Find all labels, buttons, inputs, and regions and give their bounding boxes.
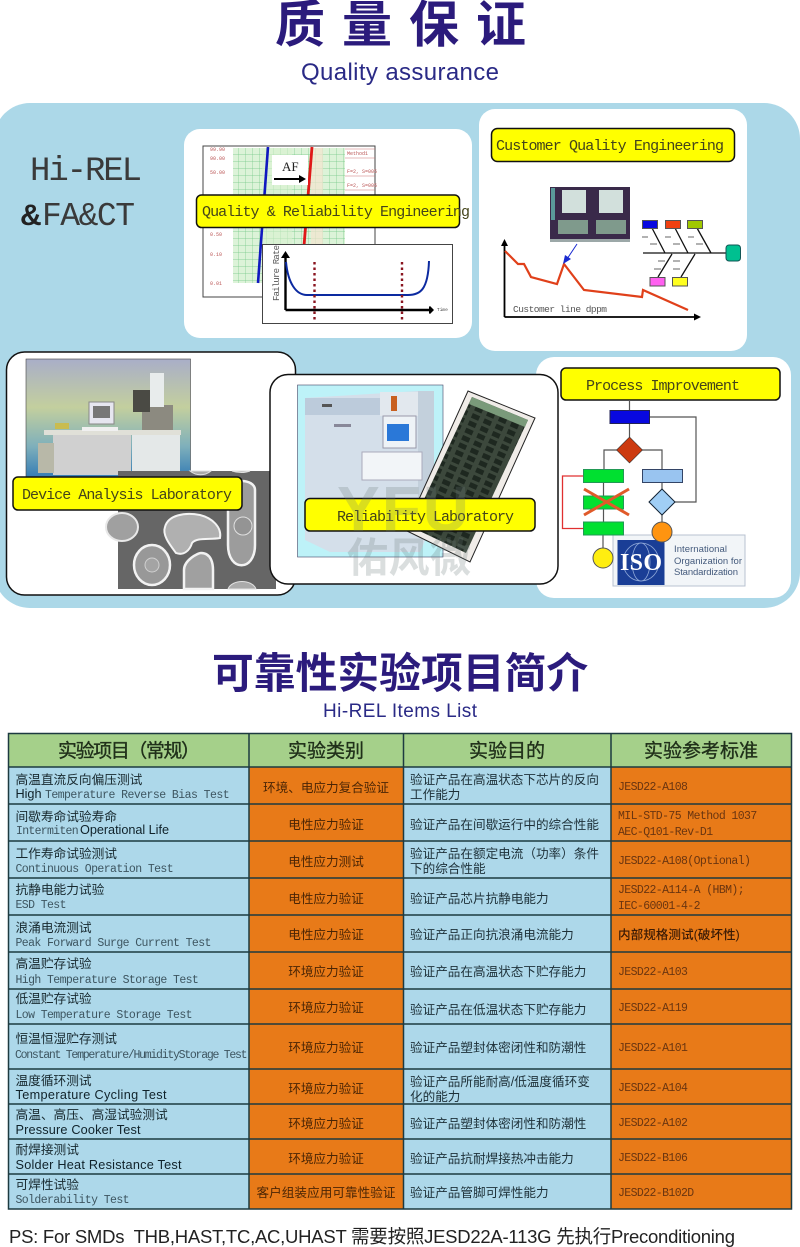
row: solderability: Solderability Test — [16, 1194, 129, 1207]
row: solderability: 验证产品管脚可焊性能力 — [410, 1185, 549, 1200]
row: temperature cycling: JESD22-A104 — [618, 1082, 688, 1095]
row: solder heat resistance: JESD22-B106 — [618, 1152, 688, 1165]
chart: Weibull acceleration plot: 0.10 — [210, 252, 222, 258]
row: temperature cycling: 温度循环测试 — [16, 1073, 92, 1088]
logo: ISO: ISO — [620, 550, 662, 576]
watermark: 佑风微 — [347, 535, 471, 581]
label: Device Analysis Laboratory: Device Analysis Laboratory — [22, 487, 232, 504]
row: pressure cooker: 高温、高压、高湿试验测试 — [16, 1107, 168, 1122]
subtitle: Quality assurance: Quality assurance — [301, 59, 499, 86]
panel: Customer Quality Engineering — [479, 109, 747, 351]
row: constant temperature humidity: 验证产品塑封体密闭性和防潮性 — [410, 1040, 586, 1055]
row: solderability: 可焊性试验 — [16, 1177, 79, 1192]
chart: Weibull acceleration plot: 0.01 — [210, 281, 222, 287]
row: pressure cooker: JESD22-A102 — [618, 1117, 688, 1130]
row: ESD: 抗静电能力试验 — [16, 882, 105, 897]
row: ESD: ESD Test — [16, 899, 66, 912]
row: HTRB: 高温直流反向偏压测试 — [16, 772, 143, 787]
row: pressure cooker: 环境应力验证 — [288, 1116, 364, 1131]
row: HTRB: High — [16, 787, 42, 801]
chart: Weibull acceleration plot: 90.00 — [210, 156, 225, 162]
row: surge: 电性应力验证 — [288, 927, 364, 942]
row: low temperature storage: Low Temperature Storage Test — [16, 1009, 192, 1022]
row: constant temperature humidity: 环境应力验证 — [288, 1040, 364, 1055]
diagram: fishbone — [642, 220, 740, 286]
row: surge: 浪涌电流测试 — [16, 921, 92, 935]
row: temperature cycling: Temperature Cycling Test — [16, 1088, 167, 1102]
row: HTRB: 验证产品在高温状态下芯片的反向 — [410, 772, 599, 787]
row: HTRB: 工作能力 — [410, 788, 460, 802]
footnote: PS: For SMDs THB,HAST,TC,AC,UHAST 需要按照JESD22A-113G 先执行Preconditioning — [9, 1226, 735, 1247]
row: surge: 内部规格测试(破坏性) — [618, 927, 740, 942]
chart: customer line dppm — [501, 239, 701, 320]
row: solderability: 客户组装应用可靠性验证 — [256, 1185, 396, 1200]
row: solder heat resistance: 耐焊接测试 — [16, 1142, 79, 1157]
row: high temperature storage: 验证产品在高温状态下贮存能力 — [410, 964, 586, 979]
row: HTRB: JESD22-A108 — [618, 781, 688, 794]
chart: Weibull acceleration plot: F=2, S=005 — [347, 169, 377, 175]
row: solderability: JESD22-B102D — [618, 1187, 694, 1200]
label: Quality and Reliability Engineering: Quality & Reliability Engineering — [202, 204, 470, 221]
row: low temperature storage: JESD22-A119 — [618, 1002, 688, 1015]
table header: 实验参考标准 — [644, 740, 758, 762]
row: solder heat resistance — [16, 1142, 688, 1172]
row: constant temperature humidity — [15, 1032, 688, 1062]
row: intermittent operational life: 间歇寿命试验寿命 — [16, 809, 117, 824]
row: HTRB: Temperature Reverse Bias Test — [45, 789, 229, 802]
panel: blue capabilities background — [0, 103, 800, 608]
image: electron microscope workstation — [26, 359, 190, 480]
chart: failure rate bathtub curve: Time — [437, 307, 448, 313]
label: Customer Quality Engineering: Customer Quality Engineering — [496, 138, 724, 155]
logo: ISO: Standardization — [674, 567, 738, 578]
panel: Quality and Reliability Engineering — [184, 129, 472, 338]
table header: 实验目的 — [469, 740, 545, 762]
row: intermittent operational life: 验证产品在间歇运行中的综合性能 — [410, 817, 599, 832]
row: ESD — [16, 882, 744, 913]
row: solder heat resistance: 验证产品抗耐焊接热冲击能力 — [410, 1151, 574, 1166]
label: Reliability Laboratory — [305, 498, 535, 531]
row: high temperature storage: 环境应力验证 — [288, 964, 364, 979]
row: high temperature storage: High Temperature Storage Test — [16, 974, 198, 987]
row: surge: Peak Forward Surge Current Test — [16, 937, 211, 950]
row: surge — [16, 921, 740, 950]
panel: Process Improvement — [536, 357, 791, 598]
image: chip die photo — [550, 187, 630, 242]
logo: ISO: International — [674, 544, 727, 555]
diagram: process flowchart — [562, 400, 696, 568]
row: continuous operation: 电性应力测试 — [288, 854, 364, 869]
row: intermittent operational life: Intermiten — [16, 825, 78, 838]
row: constant temperature humidity: Constant Temperature/HumidityStorage Test — [15, 1049, 247, 1062]
label: Reliability Laboratory: Reliability Laboratory — [337, 509, 514, 526]
watermark — [337, 473, 471, 581]
table header — [58, 740, 758, 762]
heading: Hi-REL &FA&CT: FA&CT — [42, 198, 135, 235]
chart: Weibull acceleration plot: 50.00 — [210, 170, 225, 176]
row: low temperature storage: 验证产品在低温状态下贮存能力 — [410, 1002, 586, 1017]
logo: ISO: Organization for — [674, 556, 742, 567]
row: pressure cooker: 验证产品塑封体密闭性和防潮性 — [410, 1116, 586, 1131]
image: burn-in circuit board — [405, 391, 535, 562]
panel: Reliability Laboratory — [270, 374, 558, 584]
row: pressure cooker — [16, 1107, 688, 1137]
watermark: YFU — [337, 473, 469, 545]
row: intermittent operational life: 电性应力验证 — [288, 817, 364, 832]
chart: Weibull acceleration plot: F=2, S=005 — [347, 183, 377, 189]
label: Process Improvement — [561, 368, 780, 400]
chart: Weibull acceleration plot — [203, 146, 377, 297]
table header: 实验类别 — [288, 740, 364, 762]
row: continuous operation: Continuous Operation Test — [16, 863, 173, 876]
row: pressure cooker: Pressure Cooker Test — [16, 1123, 141, 1137]
row: intermittent operational life: MIL-STD-75 Method 1037 — [618, 810, 757, 823]
chart: Weibull acceleration plot: 99.90 — [210, 147, 225, 153]
row: continuous operation: JESD22-A108(Optional) — [618, 855, 750, 868]
row: intermittent operational life: Operational Life — [80, 823, 169, 837]
row: temperature cycling: 验证产品所能耐高/低温度循环变 — [410, 1074, 590, 1089]
label: Device Analysis Laboratory — [13, 477, 242, 510]
image: SEM micrograph — [106, 471, 276, 589]
title: Hi-REL items Chinese: 可靠性实验项目简介 — [212, 650, 588, 697]
row: continuous operation: 验证产品在额定电流（功率）条件 — [410, 846, 599, 861]
heading: Hi-REL &FA&CT: Hi-REL — [30, 153, 142, 191]
chart: Weibull acceleration plot: 0.50 — [210, 232, 222, 238]
row: constant temperature humidity: JESD22-A101 — [618, 1042, 688, 1055]
row: continuous operation: 工作寿命试验测试 — [16, 846, 117, 861]
logo: ISO — [613, 535, 745, 586]
label: Process Improvement: Process Improvement — [586, 378, 740, 395]
row: continuous operation — [16, 846, 750, 876]
table header: 实验项目（常规） — [58, 740, 200, 762]
row: temperature cycling: 环境应力验证 — [288, 1081, 364, 1096]
chart: failure rate bathtub curve: Failure Rate — [272, 245, 282, 301]
row: intermittent operational life — [16, 809, 757, 839]
row: constant temperature humidity: 恒温恒湿贮存测试 — [16, 1032, 117, 1046]
heading: Hi-REL &FA&CT: & — [20, 199, 42, 232]
row: ESD: 电性应力验证 — [288, 891, 364, 906]
table: reliability tests — [8, 734, 792, 1209]
row: temperature cycling: 化的能力 — [410, 1089, 460, 1104]
row: surge: 验证产品正向抗浪涌电流能力 — [410, 927, 574, 942]
chart: customer line dppm: Customer line dppm — [513, 304, 607, 315]
label: Customer Quality Engineering — [492, 128, 734, 162]
row: temperature cycling — [16, 1073, 688, 1104]
row: ESD: 验证产品芯片抗静电能力 — [410, 891, 549, 906]
row: HTRB: 环境、电应力复合验证 — [263, 780, 389, 795]
row: solder heat resistance: Solder Heat Resistance Test — [16, 1158, 182, 1172]
row: ESD: JESD22-A114-A (HBM); — [618, 884, 744, 897]
row: continuous operation: 下的综合性能 — [410, 861, 486, 876]
chart: Weibull acceleration plot: AF — [282, 159, 299, 174]
image: reliability test chamber — [298, 385, 443, 557]
heading: Hi-REL &FA&CT — [20, 153, 142, 235]
row: low temperature storage: 低温贮存试验 — [16, 991, 92, 1006]
row: solder heat resistance: 环境应力验证 — [288, 1151, 364, 1166]
row: high temperature storage: JESD22-A103 — [618, 966, 688, 979]
chart: failure rate bathtub curve — [262, 244, 452, 324]
chart: Weibull acceleration plot: Method1 — [347, 151, 368, 157]
row: low temperature storage — [16, 991, 688, 1022]
label: Quality and Reliability Engineering — [196, 195, 470, 228]
row: HTRB — [16, 772, 688, 802]
panel: Device Analysis Laboratory — [6, 352, 296, 595]
row: high temperature storage: 高温贮存试验 — [16, 956, 92, 971]
row: low temperature storage: 环境应力验证 — [288, 1000, 364, 1015]
subtitle: Hi-REL Items List: Hi-REL Items List — [323, 701, 478, 722]
row: solderability — [16, 1177, 694, 1207]
row: ESD: IEC-60001-4-2 — [618, 900, 701, 913]
row: high temperature storage — [16, 956, 688, 987]
row: intermittent operational life: AEC-Q101-Rev-D1 — [618, 826, 713, 839]
